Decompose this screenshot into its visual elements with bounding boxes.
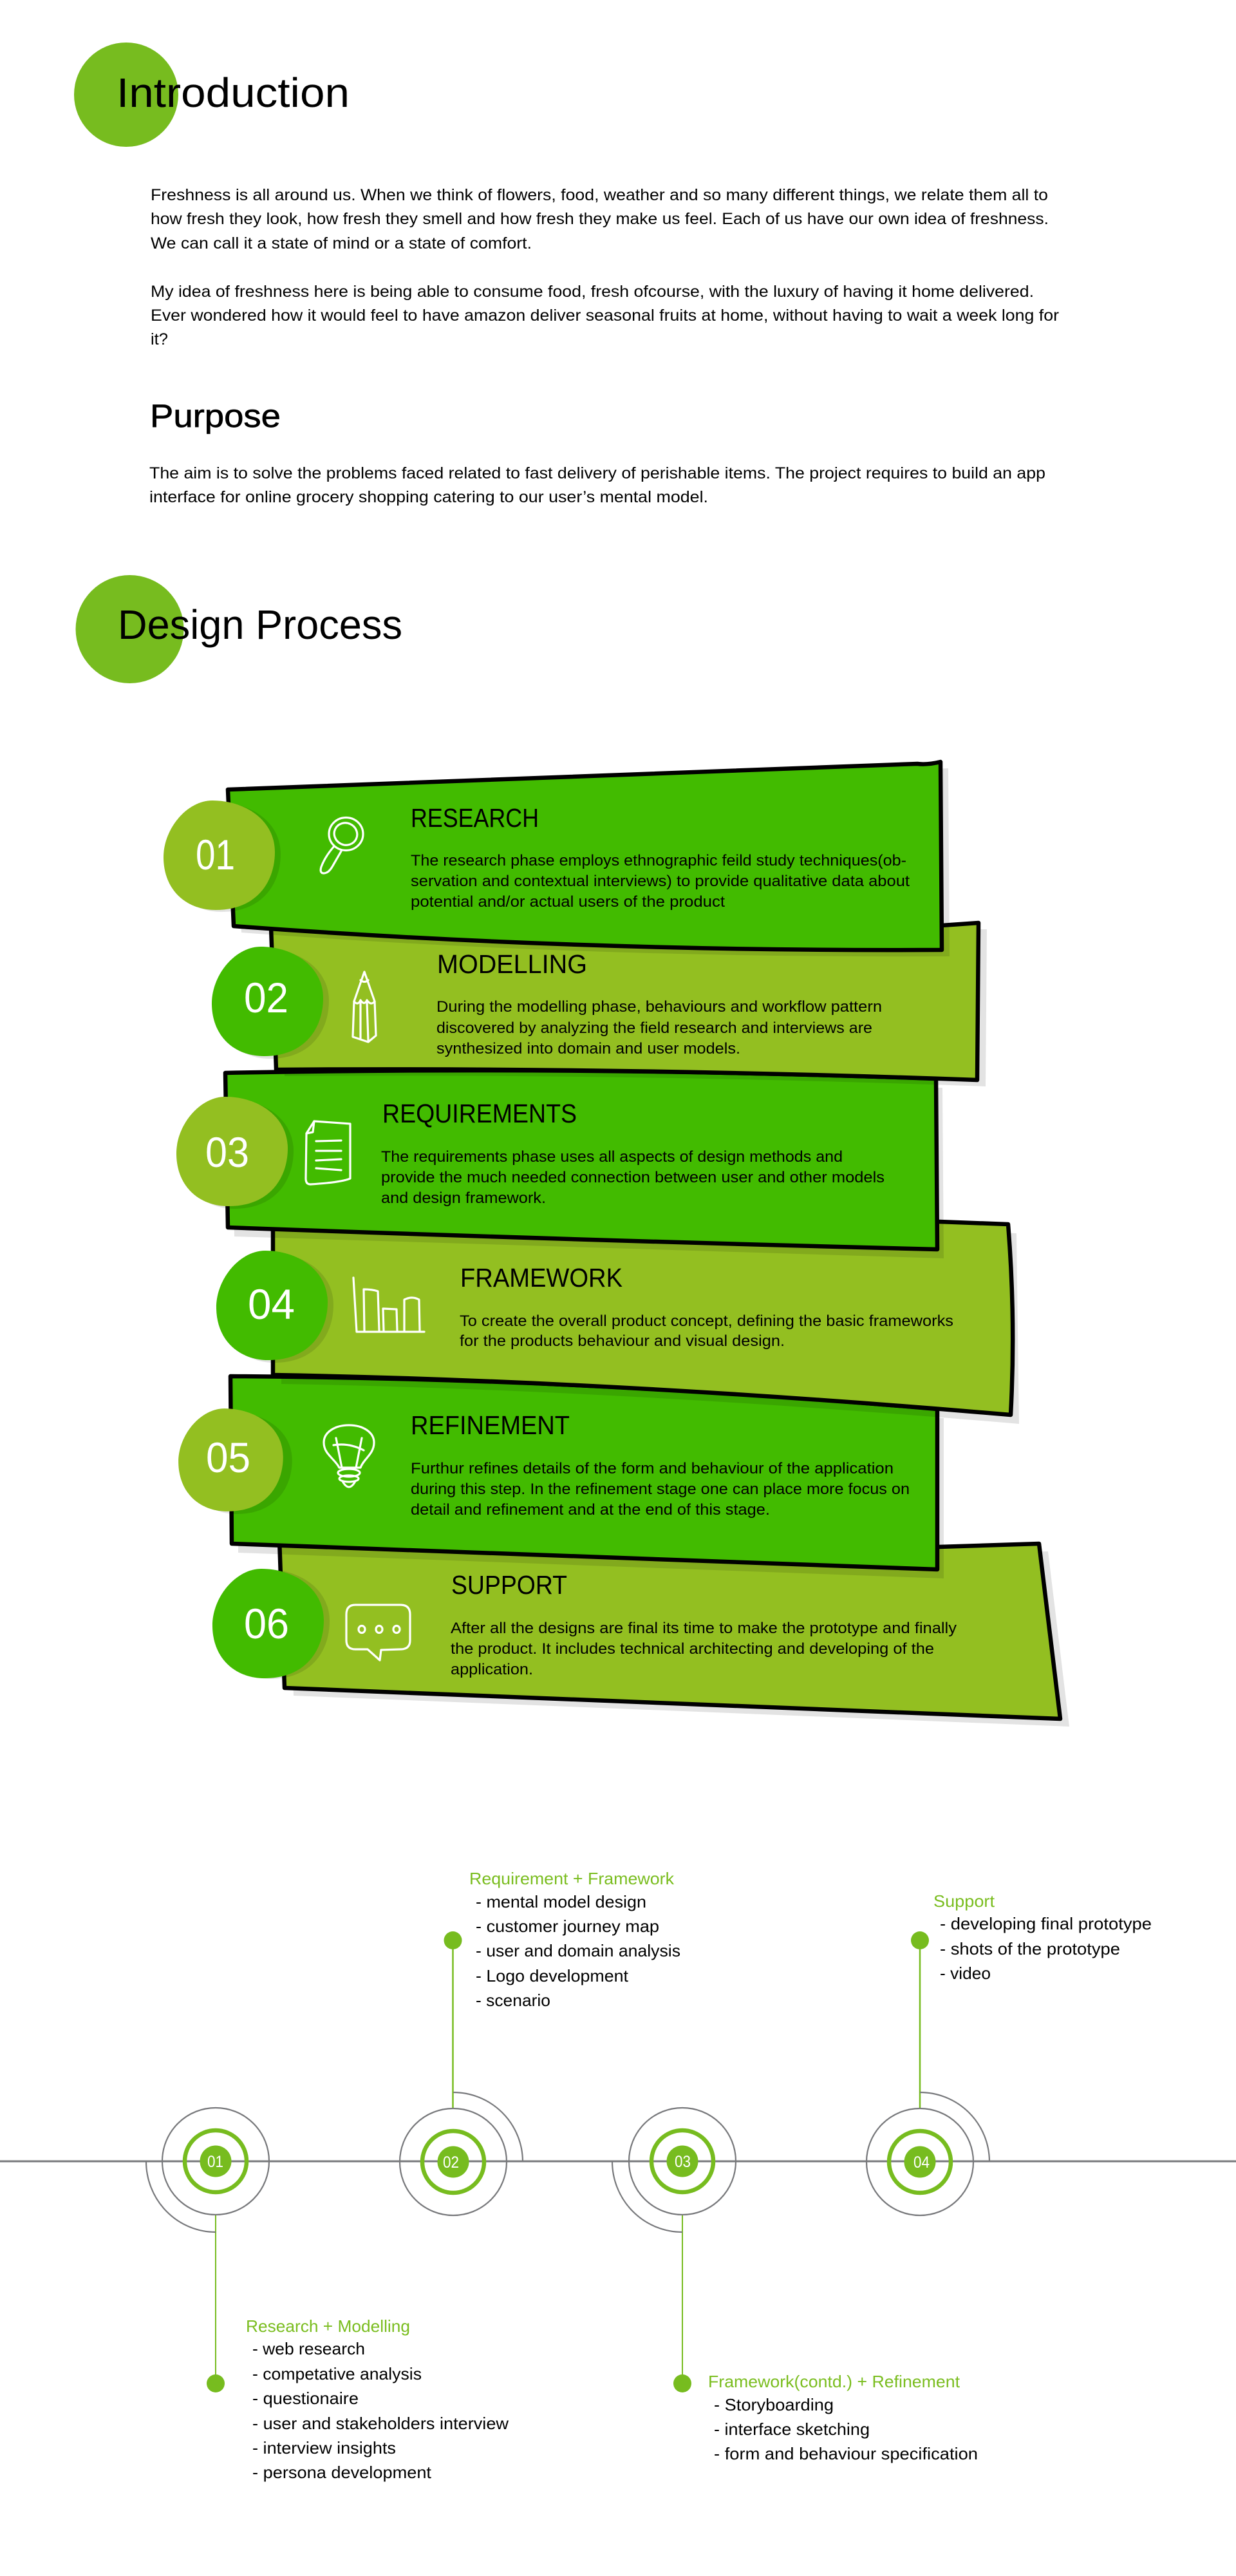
card shape 01	[228, 762, 942, 950]
badge 04	[216, 1251, 333, 1363]
icon: magnifying glass	[321, 818, 363, 873]
heading: Purpose: Purpose	[150, 398, 281, 434]
milestone 04: 04	[913, 2154, 930, 2172]
badge 05	[178, 1408, 292, 1514]
text block: requirement + framework	[469, 1869, 680, 2010]
text: research: RESEARCH	[411, 803, 539, 833]
text: refinement: Furthur refines details of the form and behaviour of the application	[411, 1460, 894, 1477]
text block: research + modelling: Research + Modelling	[246, 2316, 410, 2336]
milestone 03	[612, 2108, 736, 2392]
icon: document	[306, 1121, 350, 1184]
text block: purpose paragraph: interface for online grocery shopping catering to our user’s mental model.	[149, 488, 708, 506]
text block: research + modelling: - persona development	[252, 2463, 432, 2482]
text: support: After all the designs are final its time to make the prototype and finally	[451, 1620, 957, 1637]
text: modelling: During the modelling phase, behaviours and workflow pattern	[436, 998, 882, 1016]
panel: step 06 support	[212, 1539, 1069, 1727]
heading: Introduction	[74, 43, 350, 147]
badge 06	[212, 1569, 330, 1679]
text block: introduction paragraphs: Freshness is all around us. When we think of flowers, food, weather and so many different things, we relate them all to	[151, 186, 1048, 204]
text block: framework + refinement: - Storyboarding	[714, 2395, 834, 2414]
text block: research + modelling: - competative analysis	[252, 2364, 422, 2383]
text: support: SUPPORT	[451, 1570, 567, 1600]
icon: speech bubble	[346, 1605, 410, 1660]
text block: introduction paragraphs: We can call it a state of mind or a state of comfort.	[151, 234, 532, 252]
text: research: potential and/or actual users of the product	[411, 893, 725, 911]
text block: framework + refinement: - form and behaviour specification	[714, 2444, 978, 2463]
panel: step 04 framework	[216, 1220, 1019, 1424]
text block: research + modelling: - interview insights	[252, 2438, 396, 2458]
text block: support: - video	[940, 1964, 991, 1983]
text: refinement	[411, 1410, 910, 1519]
text block: introduction paragraphs: it?	[151, 330, 168, 348]
card shape 03	[225, 1070, 937, 1249]
text: support	[451, 1570, 957, 1678]
text block: purpose paragraph	[149, 464, 1045, 506]
badge 05: 05	[206, 1434, 250, 1481]
text: modelling: discovered by analyzing the field research and interviews are	[436, 1019, 872, 1037]
text: research	[411, 803, 910, 911]
text block: requirement + framework: Requirement + Framework	[469, 1869, 675, 1888]
text block: research + modelling	[246, 2316, 509, 2482]
milestone 03: 03	[675, 2153, 691, 2171]
icon: pencil	[353, 972, 376, 1042]
text: refinement: REFINEMENT	[411, 1410, 570, 1440]
text block: requirement + framework: - customer journey map	[476, 1917, 659, 1936]
card shape 05	[230, 1376, 937, 1569]
text: modelling: synthesized into domain and user models.	[436, 1040, 740, 1057]
milestone 01	[146, 2108, 269, 2392]
panel: step 02 modelling	[212, 923, 987, 1086]
text: research: The research phase employs ethnographic feild study techniques(ob-	[411, 852, 906, 869]
text: requirements: provide the much needed connection between user and other models	[381, 1169, 885, 1186]
icon: bar chart	[353, 1278, 424, 1332]
text: modelling	[436, 949, 882, 1057]
text block: support	[933, 1891, 1152, 1983]
text: requirements: The requirements phase uses all aspects of design methods and	[381, 1148, 843, 1166]
text block: framework + refinement	[708, 2372, 978, 2463]
text block: introduction paragraphs	[151, 186, 1059, 348]
panel: step 03 requirements	[176, 1070, 944, 1258]
text: refinement: during this step. In the refinement stage one can place more focus on	[411, 1481, 910, 1498]
text: framework: for the products behaviour and visual design.	[460, 1332, 785, 1350]
milestone 02	[400, 1931, 523, 2215]
text: requirements	[381, 1099, 885, 1207]
text: framework: To create the overall product concept, defining the basic frameworks	[460, 1312, 953, 1330]
text: modelling: MODELLING	[437, 949, 587, 979]
text block: requirement + framework: - mental model design	[476, 1892, 646, 1911]
text block: research + modelling: - web research	[252, 2339, 365, 2358]
text block: introduction paragraphs: My idea of freshness here is being able to consume food, fresh ofcourse, with the luxury of having it home delivered.	[151, 283, 1034, 301]
text: research: servation and contextual interviews) to provide qualitative data about	[411, 873, 910, 890]
heading: Design Process	[76, 575, 402, 683]
milestone 01: 01	[207, 2153, 223, 2171]
text block: purpose paragraph: The aim is to solve the problems faced related to fast delivery of perishable items. The project requires to build an app	[149, 464, 1045, 482]
panel: step 05 refinement	[178, 1376, 944, 1578]
text: requirements: REQUIREMENTS	[382, 1099, 577, 1128]
badge 01: 01	[196, 831, 235, 878]
text block: introduction paragraphs: Ever wondered how it would feel to have amazon deliver seasonal fruits at home, without having to wait a week long for	[151, 307, 1059, 325]
text block: requirement + framework: - scenario	[476, 1991, 550, 2010]
heading: Design Process: Design Process	[118, 601, 402, 648]
badge 06: 06	[244, 1600, 289, 1647]
text block: research + modelling: - questionaire	[252, 2389, 359, 2408]
text block: support: - shots of the prototype	[940, 1939, 1120, 1958]
card shape 04	[273, 1220, 1013, 1415]
text: support: application.	[451, 1661, 533, 1678]
panel: step 01 research	[164, 762, 950, 956]
card shape 02	[271, 923, 979, 1080]
text block: support: - developing final prototype	[940, 1914, 1152, 1933]
badge 02: 02	[244, 974, 288, 1021]
badge 02	[212, 947, 329, 1059]
text: framework: FRAMEWORK	[460, 1263, 623, 1293]
text: framework	[460, 1263, 953, 1350]
badge 03	[176, 1097, 294, 1209]
text block: requirement + framework: - user and domain analysis	[476, 1941, 680, 1960]
text block: research + modelling: - user and stakeholders interview	[252, 2414, 509, 2433]
milestone 02: 02	[443, 2154, 459, 2172]
timeline axis	[0, 2160, 1236, 2163]
icon: light bulb	[324, 1425, 374, 1487]
text block: framework + refinement: Framework(contd.) + Refinement	[708, 2372, 960, 2391]
text: refinement: detail and refinement and at the end of this stage.	[411, 1501, 770, 1519]
heading: Introduction: Introduction	[117, 70, 350, 116]
badge 04: 04	[248, 1280, 295, 1328]
text block: introduction paragraphs: how fresh they look, how fresh they smell and how fresh they make us feel. Each of us have our own idea of freshness.	[151, 210, 1049, 228]
milestone 04	[866, 1931, 989, 2215]
text block: support: Support	[933, 1891, 995, 1911]
badge 01	[164, 800, 281, 912]
badge 03: 03	[205, 1128, 249, 1176]
text: requirements: and design framework.	[381, 1189, 546, 1207]
card shape 06	[279, 1539, 1060, 1719]
text block: requirement + framework: - Logo development	[476, 1966, 629, 1985]
text: support: the product. It includes technical architecting and developing of the	[451, 1640, 934, 1658]
text block: framework + refinement: - interface sketching	[714, 2420, 870, 2439]
